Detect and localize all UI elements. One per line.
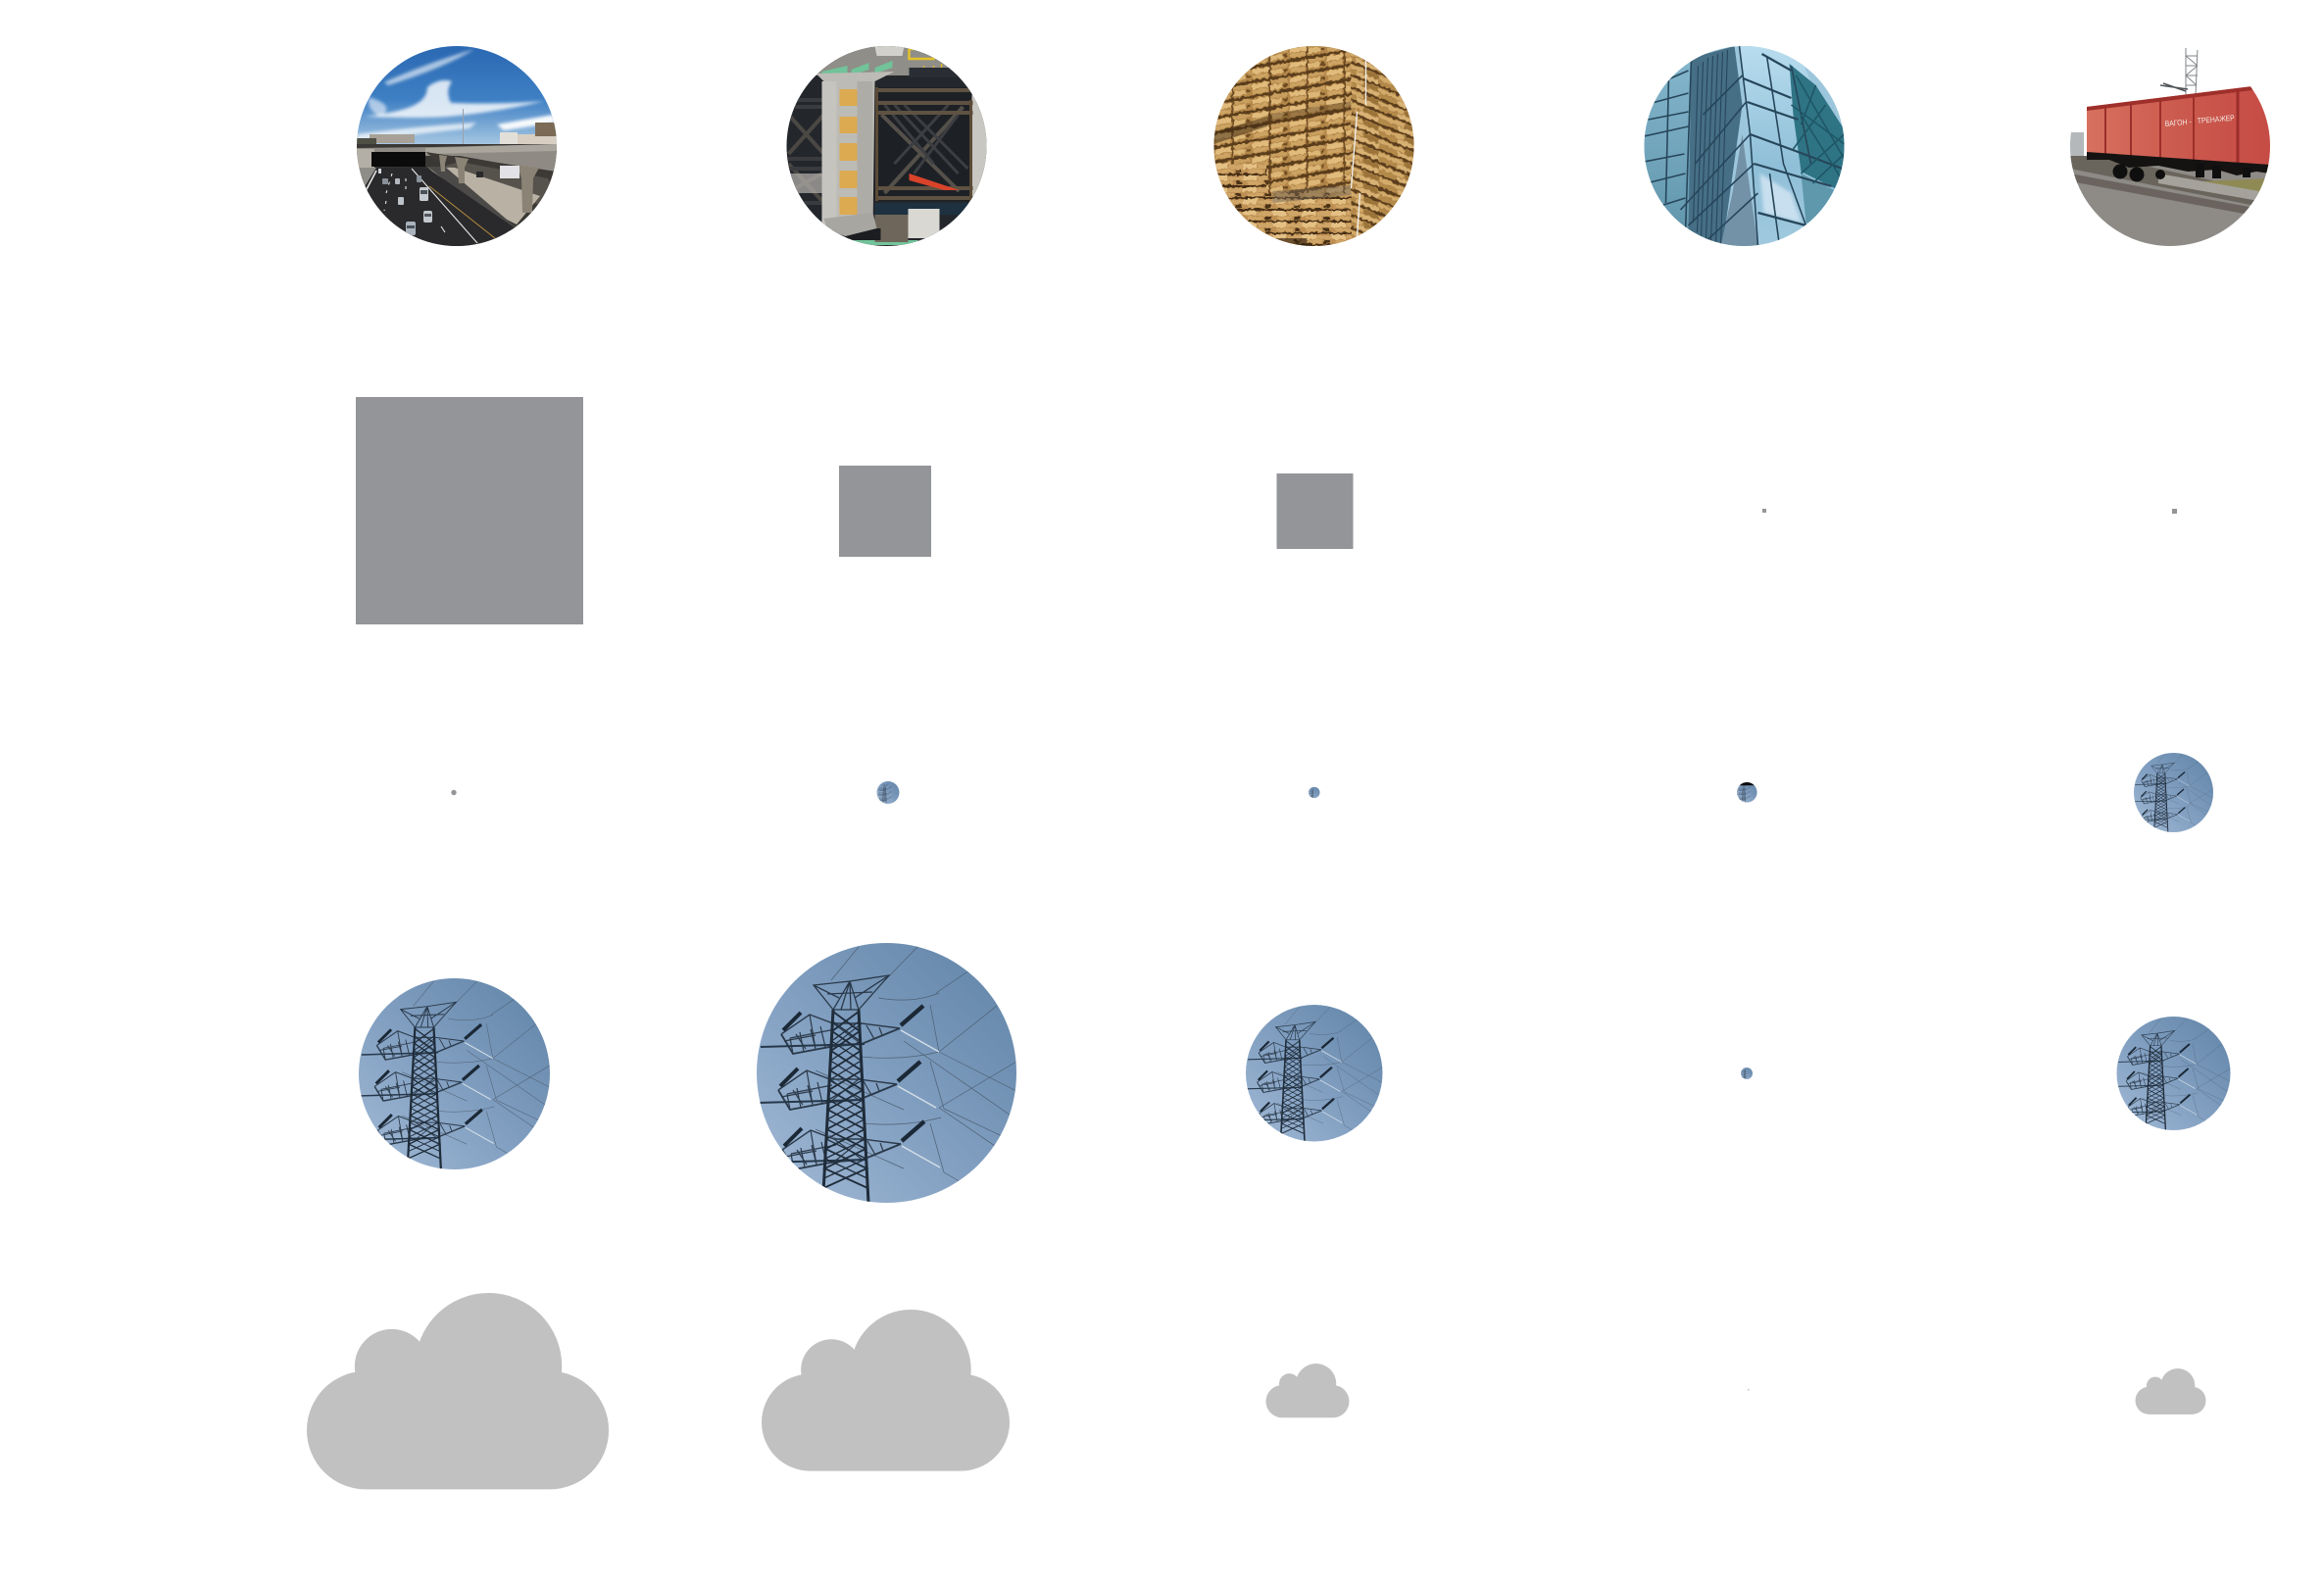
photo circle: red railway wagon: ВАГОН -	[2164, 118, 2192, 128]
pylon circle: row 3 column 5	[2134, 753, 2213, 832]
square: tiny dot column 5	[2172, 509, 2177, 514]
pylon circle: row 3 column 4	[1737, 782, 1757, 803]
pylon circle: row 4 column 5	[2117, 1017, 2230, 1130]
icon: cloud medium	[762, 1310, 1010, 1471]
infographic grid	[307, 46, 2270, 1490]
pylon circle: row 4 column 4	[1741, 1068, 1753, 1079]
photo circle: red railway wagon: ТРЕНАЖЕР	[2197, 114, 2235, 125]
dot: grey marker row 3	[451, 790, 457, 795]
pylon circle: row 4 column 3	[1246, 1005, 1382, 1141]
square: medium grey	[839, 466, 931, 557]
icon: cloud small	[1266, 1364, 1349, 1417]
icon: cloud small column 5	[2135, 1368, 2205, 1415]
pylon circle: row 3 column 2	[876, 781, 900, 804]
icon: cloud tiny speck	[1748, 1389, 1749, 1390]
pylon circle: row 3 column 3	[1309, 787, 1320, 798]
photo circle: glass office tower	[1645, 46, 1845, 246]
photo circle: red railway wagon	[2070, 46, 2270, 246]
square: large grey	[356, 397, 583, 624]
photo circle: steel and concrete structure	[786, 46, 986, 246]
photo circle: stacked timber	[1213, 46, 1413, 246]
photo circle: highway overpass	[357, 46, 557, 246]
icon: cloud large	[307, 1293, 609, 1489]
square: tiny dot column 4	[1762, 509, 1766, 513]
pylon circle: row 4 column 1	[359, 978, 550, 1169]
square: small grey	[1276, 473, 1353, 549]
pylon circle: row 4 column 2	[757, 943, 1016, 1203]
